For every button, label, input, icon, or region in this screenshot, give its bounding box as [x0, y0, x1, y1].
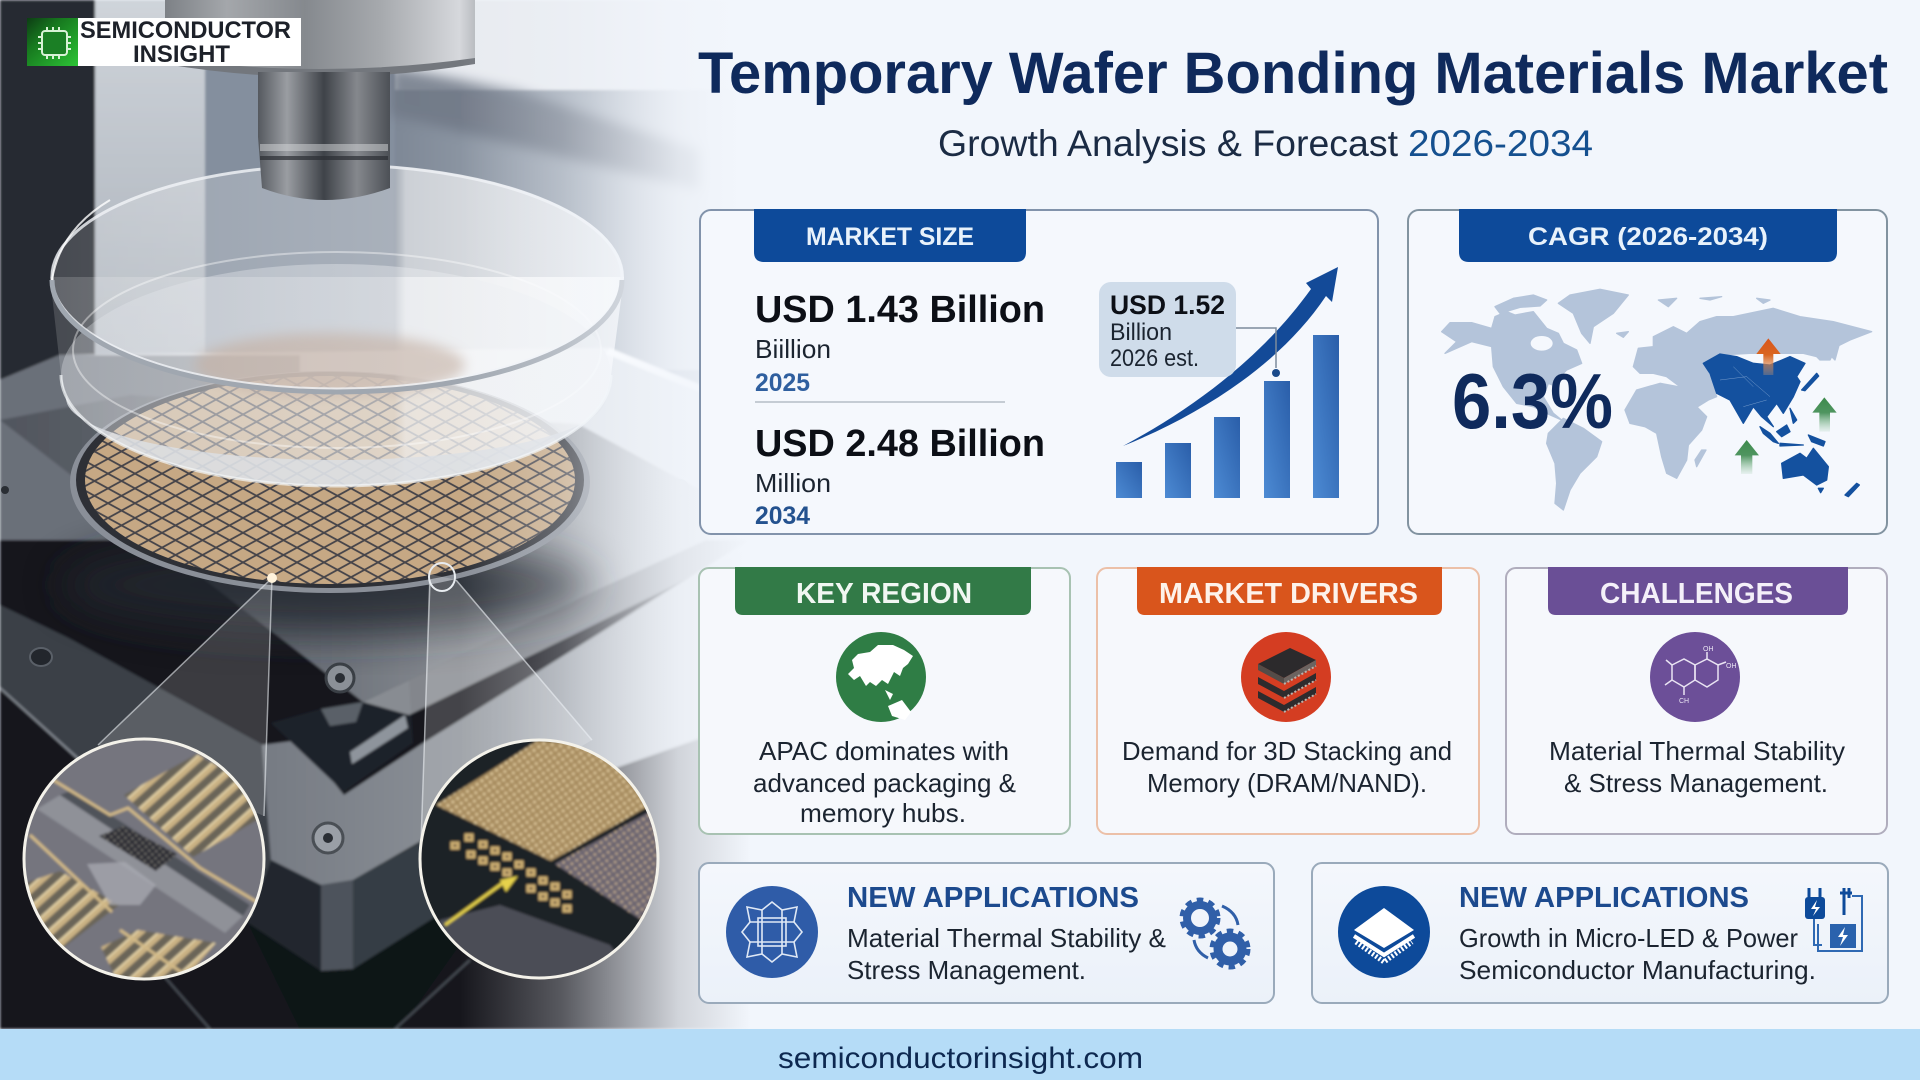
panel: market size	[700, 209, 1378, 534]
CAGR value: 6.3%	[1452, 357, 1613, 445]
key region text: APAC dominates with	[759, 736, 1009, 766]
panel: market drivers	[1097, 567, 1479, 834]
application text: Stress Management.	[847, 955, 1086, 985]
icon: gears	[1183, 901, 1247, 966]
market size header	[754, 209, 1026, 262]
hero photo: wafer under glass carrier	[0, 0, 750, 1029]
2026 estimate callout	[1099, 282, 1280, 377]
icon: molecule: OH	[1726, 663, 1736, 670]
2034 value: Million	[755, 468, 831, 498]
application text: Growth in Micro-LED & Power	[1459, 923, 1798, 953]
icon: APAC globe	[836, 632, 926, 722]
base below stage	[0, 540, 750, 1029]
2034 value: USD 2.48 Billion	[755, 423, 1045, 465]
icon: molecule: CH	[1679, 698, 1689, 705]
panel: key region	[699, 567, 1070, 834]
2026 estimate callout: Billion	[1110, 319, 1172, 346]
market drivers text: Demand for 3D Stacking and	[1122, 736, 1452, 766]
table top	[78, 352, 695, 482]
2025 value: USD 1.43 Billion	[755, 289, 1045, 331]
challenges header	[1548, 567, 1848, 615]
2025 value: 2025	[755, 369, 810, 397]
key region text: advanced packaging &	[753, 768, 1016, 798]
glass dish	[50, 277, 624, 486]
application heading: NEW APPLICATIONS	[1459, 882, 1749, 914]
2026 estimate callout: 2026 est.	[1110, 345, 1199, 372]
panel: new applications right	[1312, 863, 1888, 1003]
footer band	[0, 1029, 1920, 1080]
application text	[847, 923, 1166, 985]
application text	[1459, 923, 1816, 985]
2025 value: Biillion	[755, 334, 831, 364]
key region header: KEY REGION	[796, 578, 972, 610]
2026 estimate callout: USD 1.52	[1110, 290, 1225, 320]
title: Temporary Wafer Bonding Materials Market	[698, 41, 1888, 106]
panel: challenges	[1506, 567, 1887, 834]
2034 value: 2034	[755, 502, 810, 530]
callout beams and markers	[98, 578, 272, 816]
screws	[326, 664, 354, 692]
subtitle: 2026-2034	[1408, 123, 1593, 164]
application text: Semiconductor Manufacturing.	[1459, 955, 1816, 985]
market drivers header: MARKET DRIVERS	[1159, 578, 1418, 610]
challenges header: CHALLENGES	[1600, 578, 1793, 610]
icon: power plugs and battery	[1805, 888, 1862, 951]
CAGR header	[1459, 209, 1837, 262]
challenges text: & Stress Management.	[1564, 768, 1828, 798]
bar chart with growth arrow	[1116, 267, 1339, 498]
footer band: semiconductorinsight.com	[778, 1042, 1143, 1075]
subtitle: Growth Analysis & Forecast	[938, 123, 1399, 164]
icon: molecule: OH	[1703, 646, 1714, 653]
metal column	[165, 0, 475, 72]
CAGR header: CAGR (2026-2034)	[1528, 223, 1768, 251]
icon: molecule	[1650, 632, 1740, 722]
2034 value	[755, 423, 1045, 530]
key region header	[735, 567, 1031, 615]
inset circle: circuit traces	[20, 735, 270, 985]
upper plate	[0, 395, 750, 702]
logo: INSIGHT	[133, 41, 230, 68]
icon: stacked chips	[1241, 632, 1331, 722]
fade from photo to page	[460, 0, 751, 1029]
rail with screw	[0, 604, 272, 918]
2025 value	[755, 289, 1045, 397]
market drivers text: Memory (DRAM/NAND).	[1147, 768, 1427, 798]
logo	[27, 17, 301, 68]
key region text: memory hubs.	[800, 798, 966, 828]
inset circle: bond pads and wire	[420, 735, 660, 985]
application text: Material Thermal Stability &	[847, 923, 1166, 953]
market drivers header	[1137, 567, 1442, 615]
icon: micro-LED chip	[1338, 886, 1430, 978]
challenges text: Material Thermal Stability	[1549, 736, 1845, 766]
subtitle	[938, 123, 1593, 164]
challenges text	[1549, 736, 1845, 798]
panel: new applications left	[699, 863, 1274, 1003]
panel: CAGR	[1408, 209, 1887, 534]
application heading: NEW APPLICATIONS	[847, 882, 1139, 914]
market size header: MARKET SIZE	[806, 223, 974, 251]
lower plate	[262, 540, 750, 885]
logo: SEMICONDUCTOR	[80, 17, 291, 44]
world map	[1442, 289, 1872, 510]
market drivers text	[1122, 736, 1452, 798]
icon: circuit mesh	[726, 886, 818, 978]
wafer	[70, 371, 590, 593]
key region text	[753, 736, 1016, 828]
